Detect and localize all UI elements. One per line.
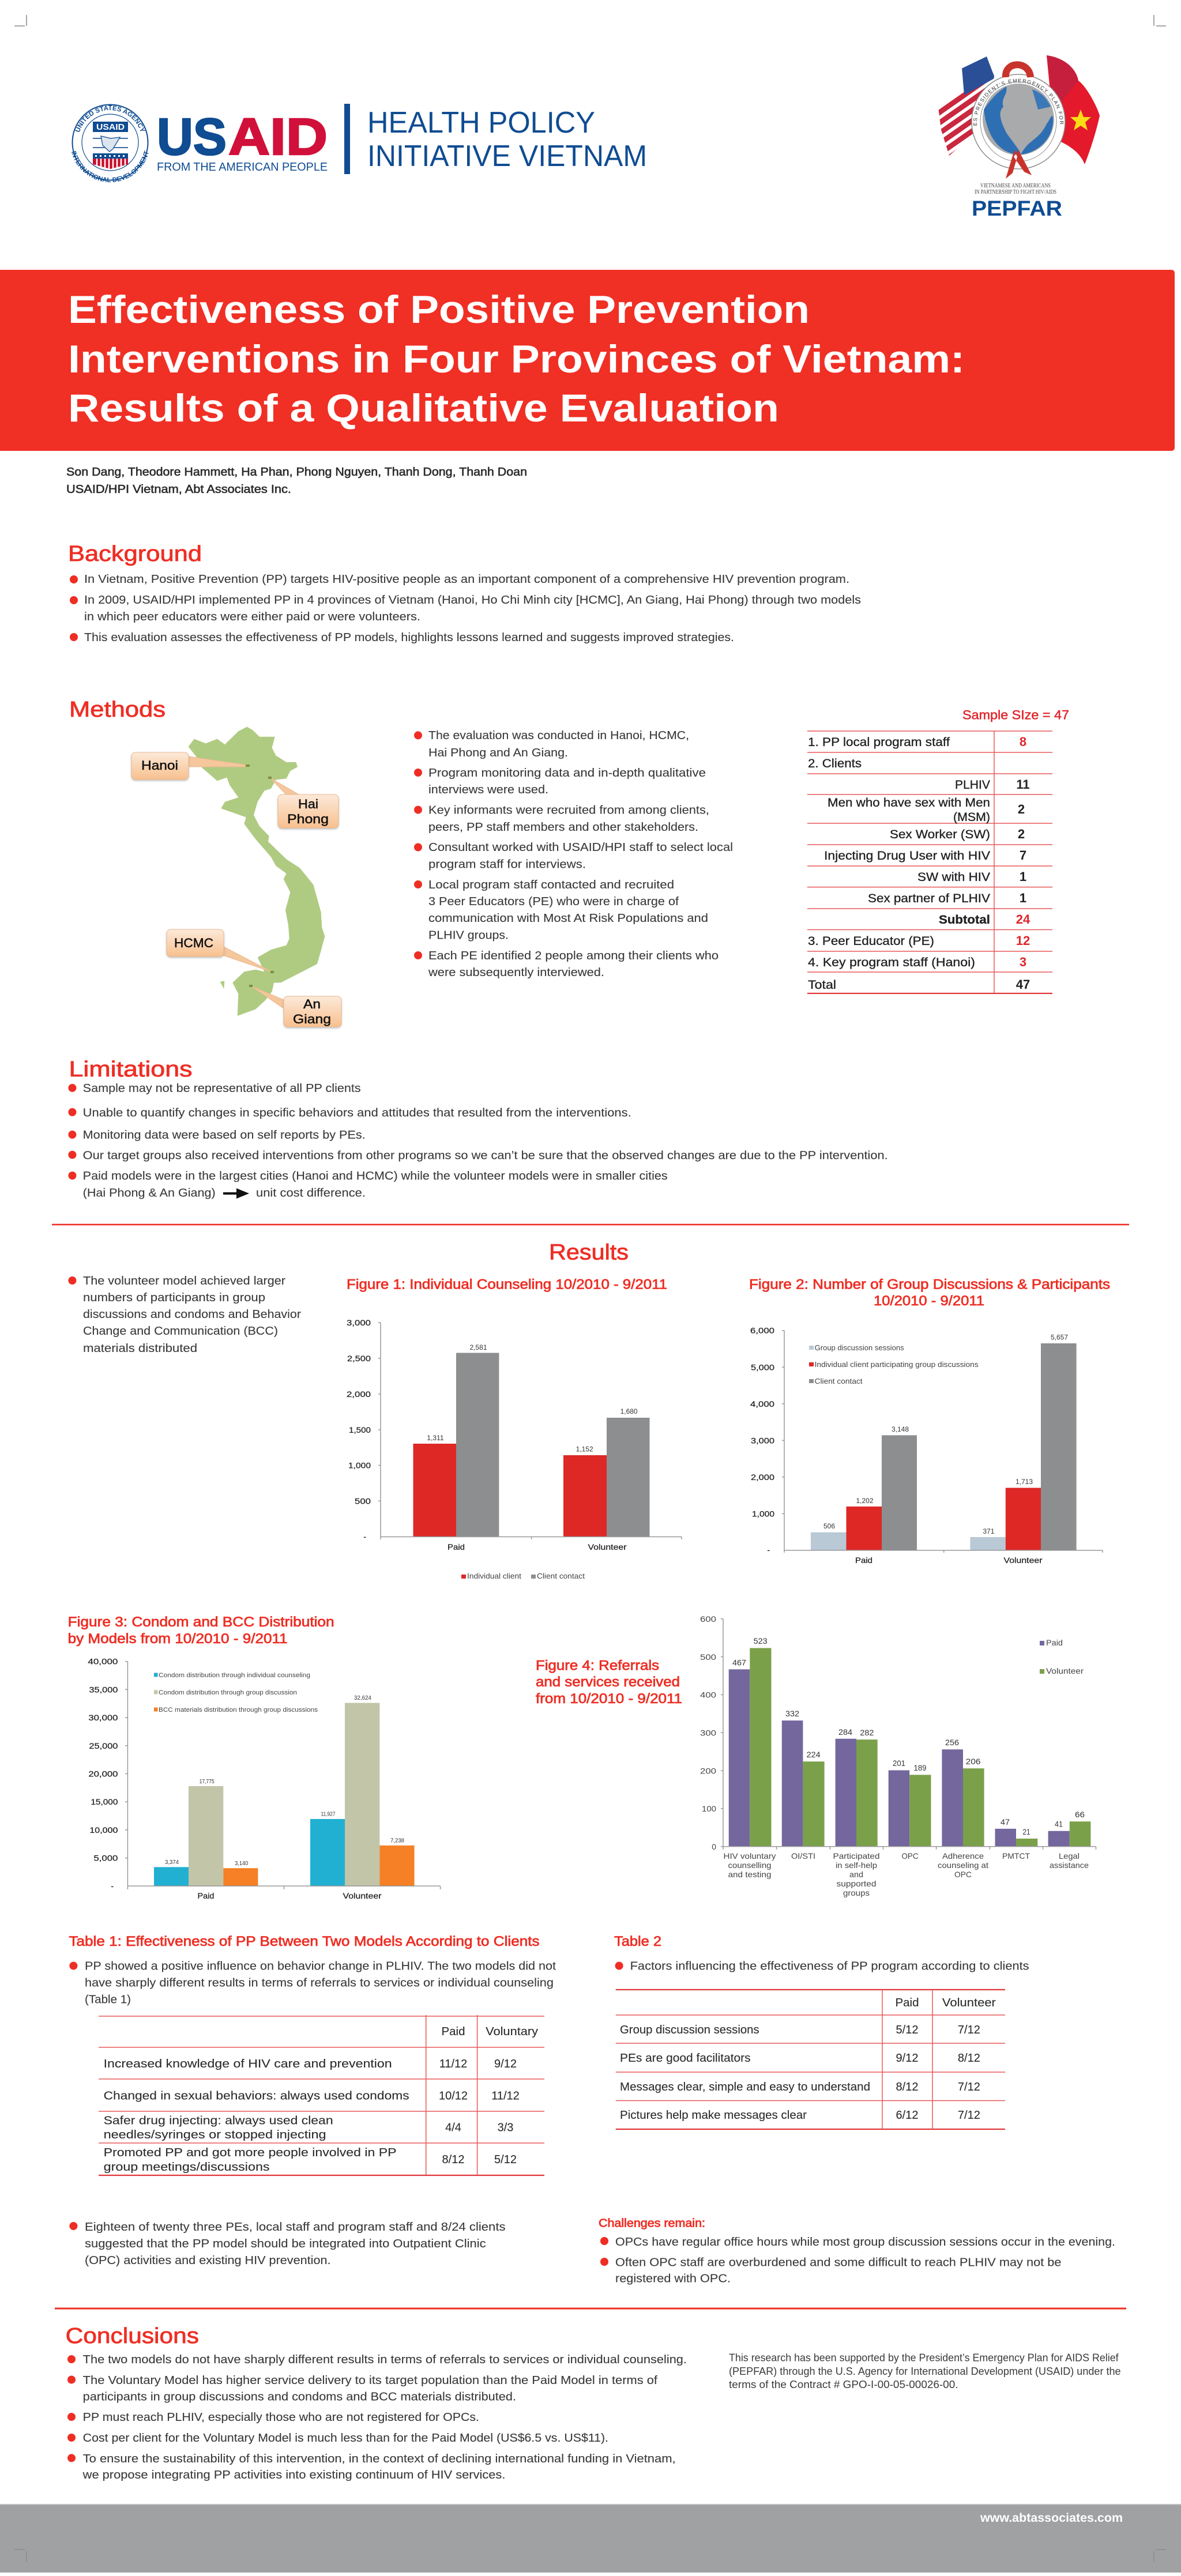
table 1 grid and values: Increased knowledge of HIV care and prevention xyxy=(104,2058,392,2070)
bar chart 3: Paid xyxy=(197,1891,215,1900)
text block: conclusions bullets xyxy=(67,2353,687,2481)
text block: results summary: Change and Communication (BCC) xyxy=(83,1325,278,1338)
text block: results summary: numbers of participants in group xyxy=(83,1291,265,1304)
table: sample size: 3 xyxy=(1020,955,1026,969)
table 2 grid and values: 9/12 xyxy=(896,2052,918,2065)
table 1 grid and values: group meetings/discussions xyxy=(104,2161,270,2174)
table 2 grid and values: PEs are good facilitators xyxy=(620,2052,751,2065)
table 1 grid and values: 4/4 xyxy=(445,2122,461,2134)
bar chart 4: 206 xyxy=(966,1757,981,1766)
table 2 grid and values: 6/12 xyxy=(896,2109,918,2122)
bar chart 3: 5,000 xyxy=(93,1854,118,1863)
table 2 grid and values xyxy=(616,1990,1005,2129)
callout: Hai Phong: Hai xyxy=(298,797,318,811)
bar chart 2: 3,148 xyxy=(892,1425,909,1433)
bar chart 1: 2,000 xyxy=(347,1389,371,1399)
bar chart 3: Volunteer xyxy=(343,1891,382,1900)
PEPFAR tagline: IN PARTNERSHIP TO FIGHT HIV/AIDS xyxy=(975,189,1056,195)
text block: methods bullets: PLHIV groups. xyxy=(428,929,509,942)
table: sample size: 4. Key program staff (Hanoi) xyxy=(808,956,975,969)
legend xyxy=(1040,1638,1084,1675)
table 2 title: Table 2 xyxy=(614,1934,661,1949)
text block: methods bullets xyxy=(414,729,733,979)
text block: challenges remain: OPCs have regular office hours while most group discussion sessions occur in the evening. xyxy=(615,2236,1115,2249)
bar chart 2: 5,000 xyxy=(751,1362,774,1372)
table: sample size: 24 xyxy=(1016,912,1030,927)
callout: HCMC xyxy=(167,929,274,973)
heading: results: Results xyxy=(549,1241,629,1265)
table 1 grid and values: 5/12 xyxy=(494,2153,517,2166)
text block: table 1 summary xyxy=(69,1960,556,2006)
text block: limitations bullets: Sample may not be representative of all PP clients xyxy=(83,1082,361,1095)
panel: table 1 xyxy=(69,1934,556,2175)
bar chart 4: 66 xyxy=(1075,1810,1085,1819)
bar chart 1: Paid xyxy=(447,1542,465,1551)
table 2 grid and values: 8/12 xyxy=(958,2052,980,2065)
table: sample size: 8 xyxy=(1020,735,1026,749)
bar chart 3: 17,775 xyxy=(200,1779,215,1785)
bar chart 4: 21 xyxy=(1023,1827,1030,1836)
legend: Condom distribution through group discussion xyxy=(159,1689,297,1696)
table 1 grid and values: Promoted PP and got more people involved in PP xyxy=(104,2146,397,2159)
table 1 grid and values: 3/3 xyxy=(498,2122,513,2134)
table 2 grid and values: 5/12 xyxy=(896,2024,918,2036)
category labels xyxy=(723,1851,1089,1897)
USAID wordmark: FROM THE AMERICAN PEOPLE xyxy=(157,161,328,174)
text block: limitations bullets: Unable to quantify changes in specific behaviors and attitudes that resulted from the interventions. xyxy=(83,1107,631,1120)
map of Vietnam with city callouts xyxy=(131,727,341,1027)
icon: USAID seal: USAID xyxy=(96,122,125,132)
table: sample size: PLHIV xyxy=(955,778,990,792)
figure 4 title: from 10/2010 - 9/2011 xyxy=(536,1691,682,1707)
text block: challenges remain: Often OPC staff are overburdened and some difficult to reach PLHIV may not be xyxy=(615,2257,1061,2269)
category labels: assistance xyxy=(1050,1861,1089,1870)
crop marks xyxy=(14,15,1166,26)
text block: background bullets: In 2009, USAID/HPI implemented PP in 4 provinces of Vietnam (Hanoi, Ho Chi Minh city [HCMC], An Giang, Hai Phong) through two models xyxy=(84,594,861,607)
bar chart 3: 3,374 xyxy=(165,1859,179,1866)
logo: USAID Health Policy Initiative Vietnam xyxy=(72,104,647,182)
text block: methods bullets: Consultant worked with USAID/HPI staff to select local xyxy=(428,841,733,854)
callout: An Giang: An xyxy=(303,997,321,1011)
legend xyxy=(809,1343,979,1385)
figure 3 title xyxy=(68,1614,334,1647)
table: sample size xyxy=(807,708,1069,993)
text block: methods bullets: Key informants were recruited from among clients, xyxy=(428,804,709,816)
table: sample size: SW with HIV xyxy=(917,871,990,884)
bar chart 3: 32,624 xyxy=(354,1695,371,1701)
legend: Client contact xyxy=(537,1572,585,1580)
panel: limitations xyxy=(68,1057,888,1199)
text block: methods bullets: Each PE identified 2 people among their clients who xyxy=(428,950,719,962)
table 1 grid and values xyxy=(99,2015,544,2175)
Health Policy Initiative Vietnam wordmark: HEALTH POLICY xyxy=(367,106,595,140)
PEPFAR tagline: VIETNAMESE AND AMERICANS xyxy=(980,182,1051,189)
icon: USAID seal xyxy=(72,104,149,182)
icon: globe seal with ribbon xyxy=(971,61,1066,179)
bar chart 4: 256 xyxy=(945,1738,959,1747)
table 1 grid and values: Voluntary xyxy=(486,2025,538,2038)
table 2 grid and values: 8/12 xyxy=(896,2081,918,2093)
footer band xyxy=(0,2504,1181,2573)
title banner: Results of a Qualitative Evaluation xyxy=(68,386,779,430)
text block: results summary xyxy=(68,1275,301,1355)
bar chart 3: 3,140 xyxy=(235,1861,249,1867)
table: sample size: Injecting Drug User with HIV xyxy=(824,849,990,863)
table: sample size: 3. Peer Educator (PE) xyxy=(808,935,934,948)
table 1 title: Table 1: Effectiveness of PP Between Two Models According to Clients xyxy=(69,1934,540,1949)
text block: limitations bullets: Our target groups also received interventions from other programs so we can’t be sure that the observed changes are due to the PP intervention. xyxy=(83,1150,888,1162)
table: sample size: 12 xyxy=(1016,933,1030,948)
text block: conclusions bullets: To ensure the sustainability of this intervention, in the context of declining international funding in Vietnam, xyxy=(83,2453,676,2465)
bar chart 4: 282 xyxy=(860,1728,874,1737)
category labels: HIV voluntary xyxy=(723,1851,776,1861)
table: sample size: Sex Worker (SW) xyxy=(890,828,990,841)
table 2 grid and values: Pictures help make messages clear xyxy=(620,2109,807,2122)
panel: conclusions xyxy=(66,2324,1121,2481)
bar chart 1 xyxy=(347,1318,682,1580)
bar chart 3 xyxy=(88,1657,441,1900)
arrow xyxy=(223,1188,249,1199)
bar chart 2: 371 xyxy=(983,1527,995,1535)
bar chart 3: 30,000 xyxy=(88,1713,118,1722)
bar chart 2: Volunteer xyxy=(1003,1556,1043,1565)
bar chart 4 xyxy=(700,1614,1096,1897)
PEPFAR tagline xyxy=(972,182,1062,220)
bar chart 2: 5,657 xyxy=(1051,1334,1068,1342)
bar chart 3: 7,238 xyxy=(390,1838,404,1844)
text block: table 1 summary: have sharply different results in terms of referrals to services or individual counseling xyxy=(85,1977,554,1990)
text block: conclusions bullets: Cost per client for the Voluntary Model is much less than for the Paid Model (US$6.5 vs. US$11). xyxy=(83,2432,608,2445)
table: sample size: 7 xyxy=(1020,848,1026,863)
footer band: www.abtassociates.com xyxy=(980,2511,1123,2525)
figure 3 title: Figure 3: Condom and BCC Distribution xyxy=(68,1614,334,1630)
panel: table 2 xyxy=(614,1934,1029,2129)
bar chart 4: 400 xyxy=(700,1690,716,1700)
bar chart 3: 35,000 xyxy=(89,1685,118,1694)
text block: methods bullets: Program monitoring data and in-depth qualitative xyxy=(428,767,706,779)
Health Policy Initiative Vietnam wordmark xyxy=(367,106,647,173)
table 2 grid and values: Paid xyxy=(895,1997,919,2009)
bar chart 4: 523 xyxy=(754,1636,768,1645)
figure 3 title: by Models from 10/2010 - 9/2011 xyxy=(68,1631,288,1647)
text block: methods bullets: program staff for interviews. xyxy=(428,858,586,871)
bar chart 1: 500 xyxy=(355,1497,371,1506)
bar chart 4: 332 xyxy=(785,1709,799,1718)
bar chart 1: 1,000 xyxy=(348,1461,371,1470)
bar chart 1: 2,581 xyxy=(469,1343,487,1351)
bar chart 4: 100 xyxy=(702,1804,716,1813)
category labels: and testing xyxy=(728,1870,772,1879)
bar chart 4: 200 xyxy=(700,1766,716,1775)
text block: PP integration finding: Eighteen of twenty three PEs, local staff and program staff and 8/24 clients xyxy=(85,2221,505,2234)
figure 2 title: 10/2010 - 9/2011 xyxy=(874,1293,984,1309)
text block: conclusions bullets: The Voluntary Model has higher service delivery to its target population than the Paid Model in terms of xyxy=(83,2374,657,2387)
figure 3: condom and BCC distribution xyxy=(68,1614,441,1900)
authors xyxy=(66,466,527,496)
text block: results summary: discussions and condoms and Behavior xyxy=(83,1308,301,1321)
legend: Individual client xyxy=(467,1572,521,1580)
table 2 grid and values: Volunteer xyxy=(942,1997,996,2009)
table 2 grid and values: 7/12 xyxy=(958,2109,980,2122)
bar chart 4: 201 xyxy=(893,1758,905,1768)
category labels: OPC xyxy=(902,1851,918,1861)
text block: methods bullets: 3 Peer Educators (PE) who were in charge of xyxy=(428,895,679,908)
heading: limitations: Limitations xyxy=(69,1057,193,1082)
bar chart 1: 1,152 xyxy=(576,1445,593,1453)
bar chart 2 xyxy=(750,1326,1103,1565)
legend: Individual client participating group discussions xyxy=(815,1360,979,1369)
bar chart 1: 3,000 xyxy=(347,1318,371,1327)
icon: USAID seal: UNITED STATES AGENCY xyxy=(75,105,145,132)
figure 2 title xyxy=(749,1277,1110,1309)
category labels: Legal xyxy=(1059,1851,1080,1861)
table 1 grid and values: Paid xyxy=(442,2025,465,2038)
table: sample size: Subtotal xyxy=(939,913,990,927)
title banner: Interventions in Four Provinces of Vietnam: xyxy=(68,337,965,381)
callout: HCMC: HCMC xyxy=(174,936,213,950)
category labels: Adherence xyxy=(942,1851,984,1861)
legend: Client contact xyxy=(815,1377,863,1385)
bar chart 3: 20,000 xyxy=(88,1769,118,1778)
figure 4 title: Figure 4: Referrals xyxy=(536,1658,659,1674)
category labels: counseling at xyxy=(938,1861,988,1870)
bar chart 4: 0 xyxy=(712,1842,716,1851)
table 1 grid and values: 10/12 xyxy=(439,2090,468,2103)
bar chart 1: Volunteer xyxy=(588,1542,627,1551)
text block: funding acknowledgement: This research has been supported by the President’s Emergency Plan for AIDS Relief xyxy=(729,2352,1119,2364)
table 1 grid and values: 8/12 xyxy=(442,2153,464,2166)
bar chart 3: 40,000 xyxy=(88,1657,118,1666)
bar chart 1: 1,680 xyxy=(620,1407,638,1415)
table 1 grid and values: Changed in sexual behaviors: always used condoms xyxy=(104,2090,409,2103)
bar chart 1: 1,500 xyxy=(349,1425,371,1434)
legend xyxy=(154,1672,318,1713)
icon: USAID seal: INTERNATIONAL DEVELOPMENT xyxy=(72,150,149,182)
panel: methods xyxy=(69,698,1069,1027)
text block: conclusions bullets: we propose integrating PP activities into existing continuum of HIV services. xyxy=(82,2469,505,2481)
legend: Volunteer xyxy=(1046,1666,1084,1675)
table: sample size: 11 xyxy=(1016,777,1030,792)
text block: background bullets: This evaluation assesses the effectiveness of PP models, highlights lessons learned and suggests improved strategies. xyxy=(84,631,734,644)
bar chart 4: 284 xyxy=(838,1727,852,1737)
bar chart 4: 300 xyxy=(700,1728,716,1738)
table 1 grid and values: 11/12 xyxy=(439,2058,467,2070)
callout: An Giang: Giang xyxy=(293,1012,331,1026)
text block: conclusions bullets: PP must reach PLHIV, especially those who are not registered for OPCs. xyxy=(83,2411,479,2424)
callout: Hanoi: Hanoi xyxy=(141,758,178,773)
bar chart 2: - xyxy=(767,1545,770,1554)
heading: background: Background xyxy=(68,542,202,566)
table 1 grid and values: 9/12 xyxy=(494,2058,517,2070)
text block: background bullets: in which peer educators were either paid or were volunteers. xyxy=(84,611,420,623)
text block: funding acknowledgement xyxy=(729,2352,1121,2390)
bar chart 1: 1,311 xyxy=(427,1434,444,1442)
table: sample size: Men who have sex with Men xyxy=(828,796,990,809)
table: sample size: 1. PP local program staff xyxy=(808,736,950,749)
figure 2 title: Figure 2: Number of Group Discussions & Participants xyxy=(749,1277,1110,1293)
logo: PEPFAR xyxy=(939,55,1100,220)
callout: Hanoi xyxy=(131,752,250,779)
text block: challenges remain: registered with OPC. xyxy=(615,2273,731,2285)
table 1 grid and values: needles/syringes or stopped injecting xyxy=(104,2129,326,2141)
table: sample size: 1 xyxy=(1020,891,1026,905)
text block: background bullets: In Vietnam, Positive Prevention (PP) targets HIV-positive people as an important component of a comprehensive HIV prevention program. xyxy=(84,573,849,586)
bar chart 3: - xyxy=(111,1881,114,1890)
text block: limitations bullets: unit cost difference. xyxy=(256,1187,366,1199)
category labels: Participated xyxy=(833,1851,880,1861)
sample size heading: Sample SIze = 47 xyxy=(962,708,1069,722)
Health Policy Initiative Vietnam wordmark: INITIATIVE VIETNAM xyxy=(367,140,647,173)
table: sample size: 1 xyxy=(1020,869,1026,884)
map shape xyxy=(189,727,325,1016)
callout: Hai Phong xyxy=(268,777,338,828)
table 2 grid and values: 7/12 xyxy=(958,2024,980,2036)
icon: US flag xyxy=(939,57,994,156)
USAID wordmark xyxy=(157,108,328,174)
USAID wordmark: US xyxy=(157,108,227,166)
table 1 grid and values: 11/12 xyxy=(491,2090,520,2103)
bar chart 2: 4,000 xyxy=(750,1399,774,1408)
table 2 grid and values: Messages clear, simple and easy to understand xyxy=(620,2081,870,2093)
figure 2: group discussions and participants xyxy=(749,1277,1110,1565)
bar chart 4: 500 xyxy=(700,1652,716,1662)
icon: Vietnam flag xyxy=(1047,55,1100,164)
category labels: supported xyxy=(836,1879,877,1888)
bar chart 4: 467 xyxy=(732,1658,746,1667)
table: sample size: 47 xyxy=(1016,977,1030,992)
bar chart 2: Paid xyxy=(855,1556,872,1565)
bar chart 3: 11,927 xyxy=(321,1812,336,1818)
text block: PP integration finding: suggested that the PP model should be integrated into Outpatient Clinic xyxy=(85,2238,486,2250)
text block: limitations bullets xyxy=(68,1082,888,1199)
bar chart 2: 1,713 xyxy=(1015,1478,1033,1486)
text block: results summary: materials distributed xyxy=(83,1342,197,1355)
table: sample size: 2. Clients xyxy=(808,757,862,770)
title banner: Effectiveness of Positive Prevention xyxy=(68,288,810,332)
text block: limitations bullets: Monitoring data were based on self reports by PEs. xyxy=(83,1129,366,1142)
text block: methods bullets: Hai Phong and An Giang. xyxy=(428,747,568,759)
table 2 grid and values: Group discussion sessions xyxy=(620,2024,759,2036)
figure 4 title xyxy=(536,1658,682,1707)
text block: PP integration finding: (OPC) activities and existing HIV prevention. xyxy=(85,2254,331,2267)
text block: limitations bullets: Paid models were in the largest cities (Hanoi and HCMC) while the volunteer models were in smaller cities xyxy=(83,1170,668,1182)
text block: table 1 summary: (Table 1) xyxy=(85,1994,131,2006)
figure 1: individual counseling xyxy=(347,1277,682,1580)
bar chart 4: 47 xyxy=(1001,1817,1010,1826)
USAID wordmark: AID xyxy=(228,108,328,166)
bar chart 2: 2,000 xyxy=(751,1472,774,1482)
bar chart 1: - xyxy=(363,1532,366,1541)
figure 4: referrals and services xyxy=(536,1614,1096,1897)
text block: background bullets xyxy=(70,573,861,644)
bar chart 2: 506 xyxy=(823,1522,835,1530)
bar chart 2: 1,202 xyxy=(856,1497,874,1505)
category labels: PMTCT xyxy=(1002,1851,1030,1861)
category labels: OI/STI xyxy=(791,1851,815,1861)
authors: USAID/HPI Vietnam, Abt Associates Inc. xyxy=(66,483,291,496)
category labels: groups xyxy=(843,1888,870,1897)
table 1 grid and values: Safer drug injecting: always used clean xyxy=(104,2114,333,2127)
title banner xyxy=(0,270,1175,451)
legend: Group discussion sessions xyxy=(815,1343,904,1352)
text block: table 2 summary: Factors influencing the effectiveness of PP program according to clients xyxy=(630,1960,1029,1973)
legend: BCC materials distribution through group discussions xyxy=(159,1707,318,1713)
text block: challenges remain: Challenges remain: xyxy=(599,2217,705,2229)
legend: Paid xyxy=(1046,1638,1063,1647)
table: sample size: Total xyxy=(808,978,836,992)
PEPFAR tagline: PEPFAR xyxy=(972,197,1062,220)
bar chart 3: 25,000 xyxy=(89,1741,118,1750)
text block: conclusions bullets: The two models do not have sharply different results in terms of referrals to services or individual counseling. xyxy=(83,2353,687,2366)
text block: methods bullets: Local program staff contacted and recruited xyxy=(428,879,674,891)
table 2 grid and values: 7/12 xyxy=(958,2081,980,2093)
text block: methods bullets: communication with Most At Risk Populations and xyxy=(428,912,708,925)
bar chart 2: 6,000 xyxy=(750,1326,774,1335)
figure 4 title: and services received xyxy=(536,1674,680,1690)
heading: conclusions: Conclusions xyxy=(66,2324,199,2348)
text block: conclusions bullets: participants in group discussions and condoms and BCC materials distributed. xyxy=(83,2390,516,2403)
text block: results summary: The volunteer model achieved larger xyxy=(83,1275,285,1287)
text block: methods bullets: were subsequently interviewed. xyxy=(428,966,604,979)
table: sample size: 2 xyxy=(1018,802,1025,816)
table: sample size: Sex partner of PLHIV xyxy=(868,892,990,905)
table: sample size: (MSM) xyxy=(953,811,990,824)
bar chart 2: 3,000 xyxy=(751,1436,774,1445)
heading: methods: Methods xyxy=(69,698,166,722)
bar chart 4: 224 xyxy=(807,1750,821,1759)
table: sample size: 2 xyxy=(1018,827,1025,841)
authors: Son Dang, Theodore Hammett, Ha Phan, Phong Nguyen, Thanh Dong, Thanh Doan xyxy=(66,466,527,479)
category labels: in self-help xyxy=(836,1861,877,1870)
text block: methods bullets: peers, PP staff members and other stakeholders. xyxy=(428,821,698,834)
text block: funding acknowledgement: terms of the Contract # GPO-I-00-05-00026-00. xyxy=(729,2379,958,2390)
text block: funding acknowledgement: (PEPFAR) through the U.S. Agency for International Development (USAID) under the xyxy=(729,2366,1121,2377)
bar chart 3: 10,000 xyxy=(89,1825,118,1835)
text block: table 1 summary: PP showed a positive influence on behavior change in PLHIV. The two models did not xyxy=(85,1960,556,1973)
bar chart 3: 15,000 xyxy=(91,1797,118,1806)
text block: challenges remain xyxy=(599,2217,1115,2285)
callout: An Giang xyxy=(249,985,341,1027)
bar chart 4: 41 xyxy=(1055,1820,1063,1829)
panel: background xyxy=(68,542,861,644)
category labels: OPC xyxy=(954,1870,972,1879)
text block: methods bullets: The evaluation was conducted in Hanoi, HCMC, xyxy=(428,729,689,742)
bar chart 1: 2,500 xyxy=(347,1354,371,1363)
legend: Condom distribution through individual counseling xyxy=(159,1672,310,1679)
text block: limitations bullets: (Hai Phong & An Giang) xyxy=(83,1187,216,1199)
text block: PP integration finding xyxy=(69,2221,505,2267)
bar chart 2: 1,000 xyxy=(752,1509,774,1519)
figure 1 title: Figure 1: Individual Counseling 10/2010 - 9/2011 xyxy=(347,1277,667,1293)
category labels: and xyxy=(849,1870,863,1879)
callout: Hai Phong: Phong xyxy=(287,812,329,826)
legend xyxy=(461,1572,585,1580)
bar chart 4: 189 xyxy=(913,1763,927,1772)
text block: methods bullets: interviews were used. xyxy=(428,784,548,796)
category labels: counselling xyxy=(728,1861,772,1870)
bar chart 4: 600 xyxy=(700,1614,716,1624)
